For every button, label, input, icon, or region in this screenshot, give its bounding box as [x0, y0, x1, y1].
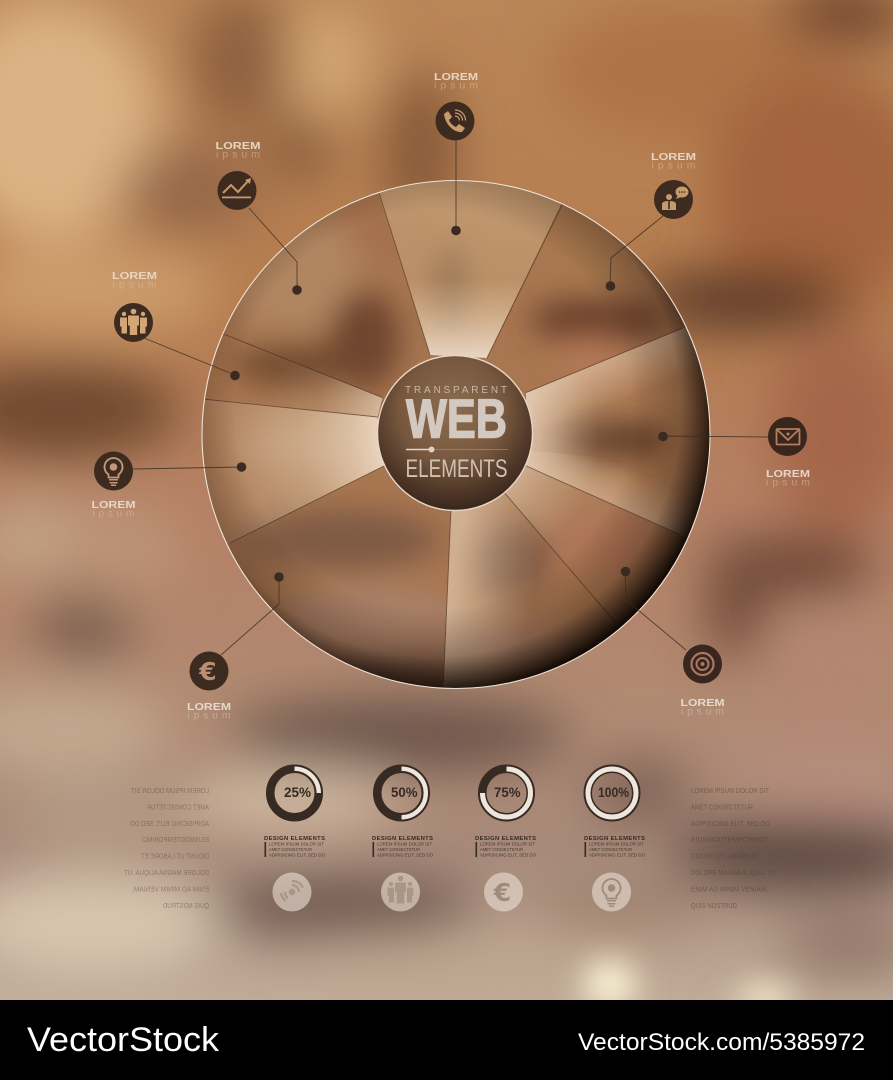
icon: signal disc	[272, 872, 312, 912]
label: phone: LOREM	[434, 72, 478, 83]
left mirrored text list: AMET CONSECTETUR	[147, 804, 209, 812]
label: phone: ipsum	[434, 80, 478, 92]
label: chat: LOREM	[651, 152, 696, 163]
icon: euro: €	[198, 657, 217, 686]
caption: column 3: ADIPISICING ELIT, SED DO	[480, 852, 536, 858]
donut chart: 75%	[482, 769, 531, 817]
caption: column 2: AMET CONSECTETUR	[377, 847, 420, 853]
footer url: VectorStock.com/5385972	[578, 1029, 865, 1056]
panel: transparent radial glass wheel	[201, 180, 711, 689]
donut chart: 25%	[270, 769, 319, 817]
center hub	[378, 356, 532, 510]
right text list: AMET CONSECTETUR	[691, 804, 753, 812]
label: target: LOREM	[680, 698, 724, 709]
icon: euro badge	[484, 872, 523, 912]
label: chart: LOREM	[216, 141, 260, 152]
label: chart: ipsum	[216, 148, 260, 160]
caption: column 3: AMET CONSECTETUR	[480, 847, 523, 853]
right text list: ENIM AD MINIM VENIAM,	[691, 886, 768, 894]
caption: column 1: AMET CONSECTETUR	[269, 847, 312, 853]
label: people	[112, 271, 157, 290]
right text list: DOLORE MAGNA ALIQUA. UT	[691, 870, 777, 877]
label: bulb: LOREM	[92, 500, 136, 511]
wedge: lower right	[505, 466, 594, 550]
caption: column 3: DESIGN ELEMENTS	[475, 836, 536, 842]
caption: column 2: DESIGN ELEMENTS	[372, 836, 433, 842]
label: chat: ipsum	[652, 160, 696, 172]
wedge: right	[526, 370, 625, 493]
caption: column 4	[584, 836, 645, 858]
icon: light bulb	[94, 452, 133, 490]
left mirrored text list: ENIM AD MINIM VENIAM,	[132, 886, 209, 894]
wedge edge lines	[203, 191, 683, 682]
caption: column 2: ADIPISICING ELIT, SED DO	[377, 852, 433, 858]
label: envelope: LOREM	[766, 469, 810, 480]
donut chart: 25%: 25%	[284, 785, 311, 800]
donut chart: 100%: 100%	[598, 785, 629, 800]
donut chart: 100%	[588, 769, 636, 817]
label: envelope: ipsum	[766, 476, 810, 488]
caption: column 1	[264, 836, 325, 858]
caption: column 1: DESIGN ELEMENTS	[264, 836, 325, 842]
donut chart: 50%: 50%	[391, 785, 418, 800]
icon: phone	[436, 102, 474, 140]
left mirrored text list	[123, 788, 209, 910]
donut chart: 75%: 75%	[494, 785, 520, 800]
icon: euro	[190, 652, 228, 690]
caption: column 2: LOREM IPSUM DOLOR SIT	[377, 842, 432, 848]
right text list: QUIS NOSTRUD	[691, 903, 737, 910]
caption: column 3	[475, 836, 536, 858]
wedge: bottom	[443, 494, 535, 688]
caption: column 4: ADIPISICING ELIT, SED DO	[589, 852, 645, 858]
wedge: thin upper left	[298, 367, 382, 417]
footer brand: VectorStock	[27, 1021, 220, 1059]
donut chart: 50%	[377, 769, 426, 817]
wheel interior with wedges	[202, 181, 710, 688]
caption: column 3: LOREM IPSUM DOLOR SIT	[480, 842, 535, 848]
hub text: elements: ELEMENTS	[406, 455, 508, 483]
caption: column 1: LOREM IPSUM DOLOR SIT	[269, 842, 324, 848]
wedge: right lower highlight	[526, 452, 684, 534]
icon: target	[683, 644, 722, 684]
right text list	[691, 788, 777, 910]
wheel outline	[202, 180, 710, 688]
label: people: LOREM	[112, 271, 157, 282]
footer bar	[0, 1000, 893, 1080]
label: target: ipsum	[681, 706, 724, 718]
icon: people badge	[381, 872, 420, 912]
caption: column 4: DESIGN ELEMENTS	[584, 836, 645, 842]
right text list: EIUSMODTEMPORINCI	[691, 837, 767, 844]
label: envelope	[766, 469, 810, 488]
connector lines	[133, 140, 768, 655]
label: chart	[216, 141, 260, 160]
connector end dots	[230, 226, 668, 582]
icon: people	[114, 303, 153, 342]
wedge: left	[206, 399, 384, 540]
caption: column 2	[372, 836, 433, 858]
hub text: web: WEB	[406, 388, 507, 450]
left mirrored text list: DOLORE MAGNA ALIQUA. UT	[123, 870, 209, 877]
left mirrored text list: ADIPISICING ELIT, SED DO	[130, 821, 209, 828]
wedge: top	[378, 181, 561, 358]
label: bulb: ipsum	[92, 508, 135, 520]
wedge: right upper highlight	[526, 327, 695, 416]
icon: envelope	[768, 417, 807, 456]
hub text: transparent: TRANSPARENT	[405, 385, 507, 396]
left mirrored text list: LOREM IPSUM DOLOR SIT	[130, 788, 209, 795]
left mirrored text list: EIUSMODTEMPORINCI	[142, 837, 209, 844]
label: phone	[434, 72, 478, 92]
right text list: ADIPISICING ELIT, SED DO	[691, 821, 770, 828]
caption: column 4: AMET CONSECTETUR	[589, 847, 632, 853]
left mirrored text list: DIDUNT UT LABORE ET	[140, 854, 209, 860]
label: people: ipsum	[112, 278, 157, 290]
label: bulb	[92, 500, 136, 520]
hub slider	[406, 446, 508, 452]
left mirrored text list: QUIS NOSTRUD	[163, 903, 209, 910]
icon: line chart	[218, 171, 256, 210]
caption: column 4: LOREM IPSUM DOLOR SIT	[589, 842, 644, 848]
icon: bulb badge	[592, 872, 631, 912]
right text list: LOREM IPSUM DOLOR SIT	[691, 788, 770, 795]
label: euro: LOREM	[187, 702, 231, 713]
caption: column 1: ADIPISICING ELIT, SED DO	[269, 852, 325, 858]
icon: chat person	[654, 180, 693, 219]
icon: euro badge: €	[493, 878, 511, 907]
label: euro	[187, 702, 231, 722]
right text list: DIDUNT UT LABORE ET	[691, 854, 760, 860]
label: euro: ipsum	[188, 710, 231, 722]
label: target	[680, 698, 724, 718]
label: chat	[651, 152, 696, 172]
